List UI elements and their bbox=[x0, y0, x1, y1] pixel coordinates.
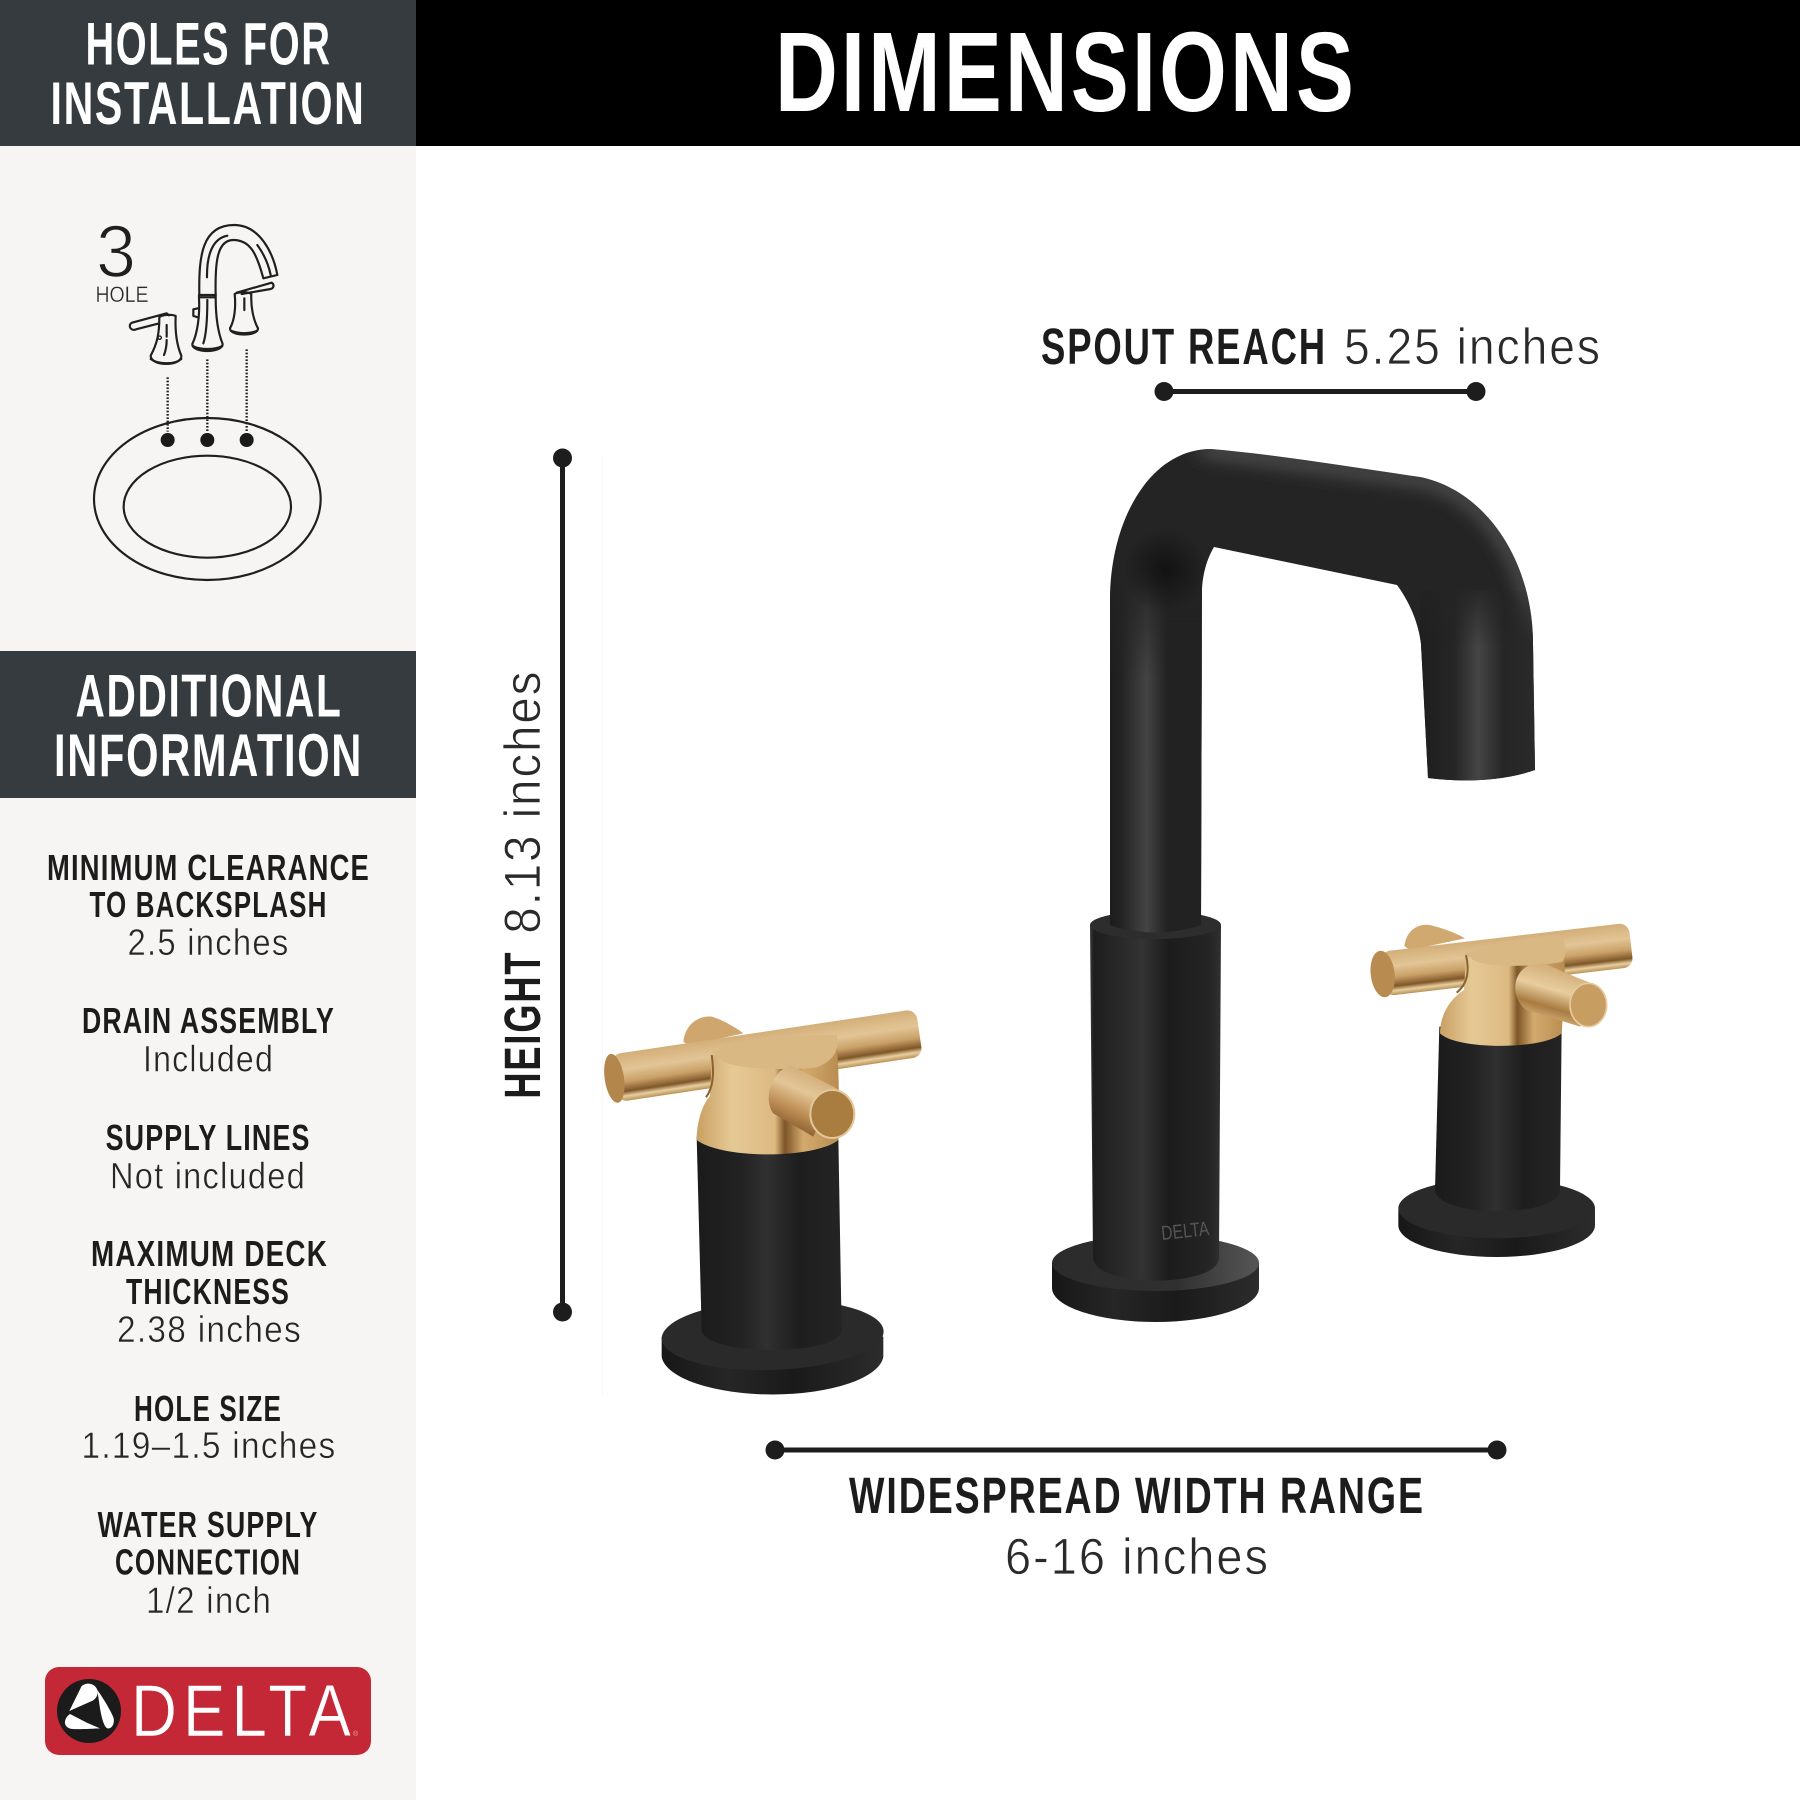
info: water supply connection: WATER SUPPLY bbox=[98, 1504, 319, 1545]
info: hole size bbox=[82, 1388, 336, 1466]
heading: additional information: INFORMATION bbox=[54, 722, 363, 789]
logo: delta bbox=[45, 1667, 371, 1755]
logo: delta: ® bbox=[353, 1730, 359, 1738]
faucet collar: DELTA bbox=[1160, 1218, 1211, 1245]
dimension: height: 8.13 inches bbox=[494, 670, 551, 934]
info: minimum clearance: 2.5 inches bbox=[128, 922, 290, 963]
info: minimum clearance: TO BACKSPLASH bbox=[90, 884, 328, 925]
left sidebar panel bbox=[0, 0, 416, 1800]
heading: holes for installation: INSTALLATION bbox=[50, 70, 366, 137]
dimension: widespread width range bbox=[766, 1440, 1506, 1585]
info: drain assembly: DRAIN ASSEMBLY bbox=[82, 1000, 335, 1041]
faucet: right cross handle bbox=[1368, 922, 1634, 1257]
heading: holes for installation: HOLES FOR bbox=[86, 10, 332, 78]
dimension: spout reach: 5.25 inches bbox=[1344, 318, 1602, 375]
info: water supply connection: 1/2 inch bbox=[146, 1580, 272, 1621]
dimension: height bbox=[494, 448, 572, 1322]
title banner: dimensions: DIMENSIONS bbox=[775, 9, 1357, 135]
info: supply lines bbox=[106, 1117, 311, 1196]
title banner: dimensions bbox=[416, 0, 1800, 146]
info: maximum deck thickness: 2.38 inches bbox=[117, 1309, 302, 1350]
info: supply lines: Not included bbox=[110, 1156, 306, 1196]
info: minimum clearance: MINIMUM CLEARANCE bbox=[47, 847, 370, 888]
info: minimum clearance bbox=[47, 847, 370, 963]
icon: 3 hole faucet and sink diagram: HOLE bbox=[96, 282, 148, 307]
dimension: widespread width range: WIDESPREAD WIDTH RANGE bbox=[849, 1467, 1425, 1524]
logo: delta: DELTA bbox=[131, 1671, 357, 1752]
info: drain assembly: Included bbox=[143, 1038, 274, 1080]
info: water supply connection bbox=[98, 1504, 319, 1621]
info: drain assembly bbox=[82, 1000, 335, 1080]
info: hole size: 1.19–1.5 inches bbox=[82, 1425, 336, 1466]
faucet base plate bbox=[1052, 1235, 1259, 1322]
info: hole size: HOLE SIZE bbox=[134, 1388, 282, 1429]
faucet: left cross handle bbox=[601, 1008, 923, 1394]
info: water supply connection: CONNECTION bbox=[115, 1542, 301, 1582]
faucet collar bbox=[1090, 911, 1221, 1280]
faucet spout tube bbox=[1110, 449, 1535, 932]
info: maximum deck thickness bbox=[91, 1233, 328, 1350]
heading: additional information bbox=[0, 651, 416, 798]
heading: holes for installation bbox=[0, 0, 416, 146]
faucet: center spout bbox=[1052, 440, 1550, 1322]
info: maximum deck thickness: MAXIMUM DECK bbox=[91, 1233, 328, 1274]
info: supply lines: SUPPLY LINES bbox=[106, 1117, 311, 1158]
dimension: height: HEIGHT bbox=[494, 951, 551, 1099]
heading: additional information: ADDITIONAL bbox=[76, 662, 342, 730]
dimension: spout reach bbox=[1041, 318, 1602, 401]
icon: 3 hole faucet and sink diagram: 3 bbox=[96, 210, 136, 293]
icon: 3 hole faucet and sink diagram bbox=[94, 210, 321, 580]
dimension: widespread width range: 6-16 inches bbox=[1005, 1528, 1270, 1585]
info: maximum deck thickness: THICKNESS bbox=[126, 1271, 290, 1312]
dimension: spout reach: SPOUT REACH bbox=[1041, 318, 1327, 375]
